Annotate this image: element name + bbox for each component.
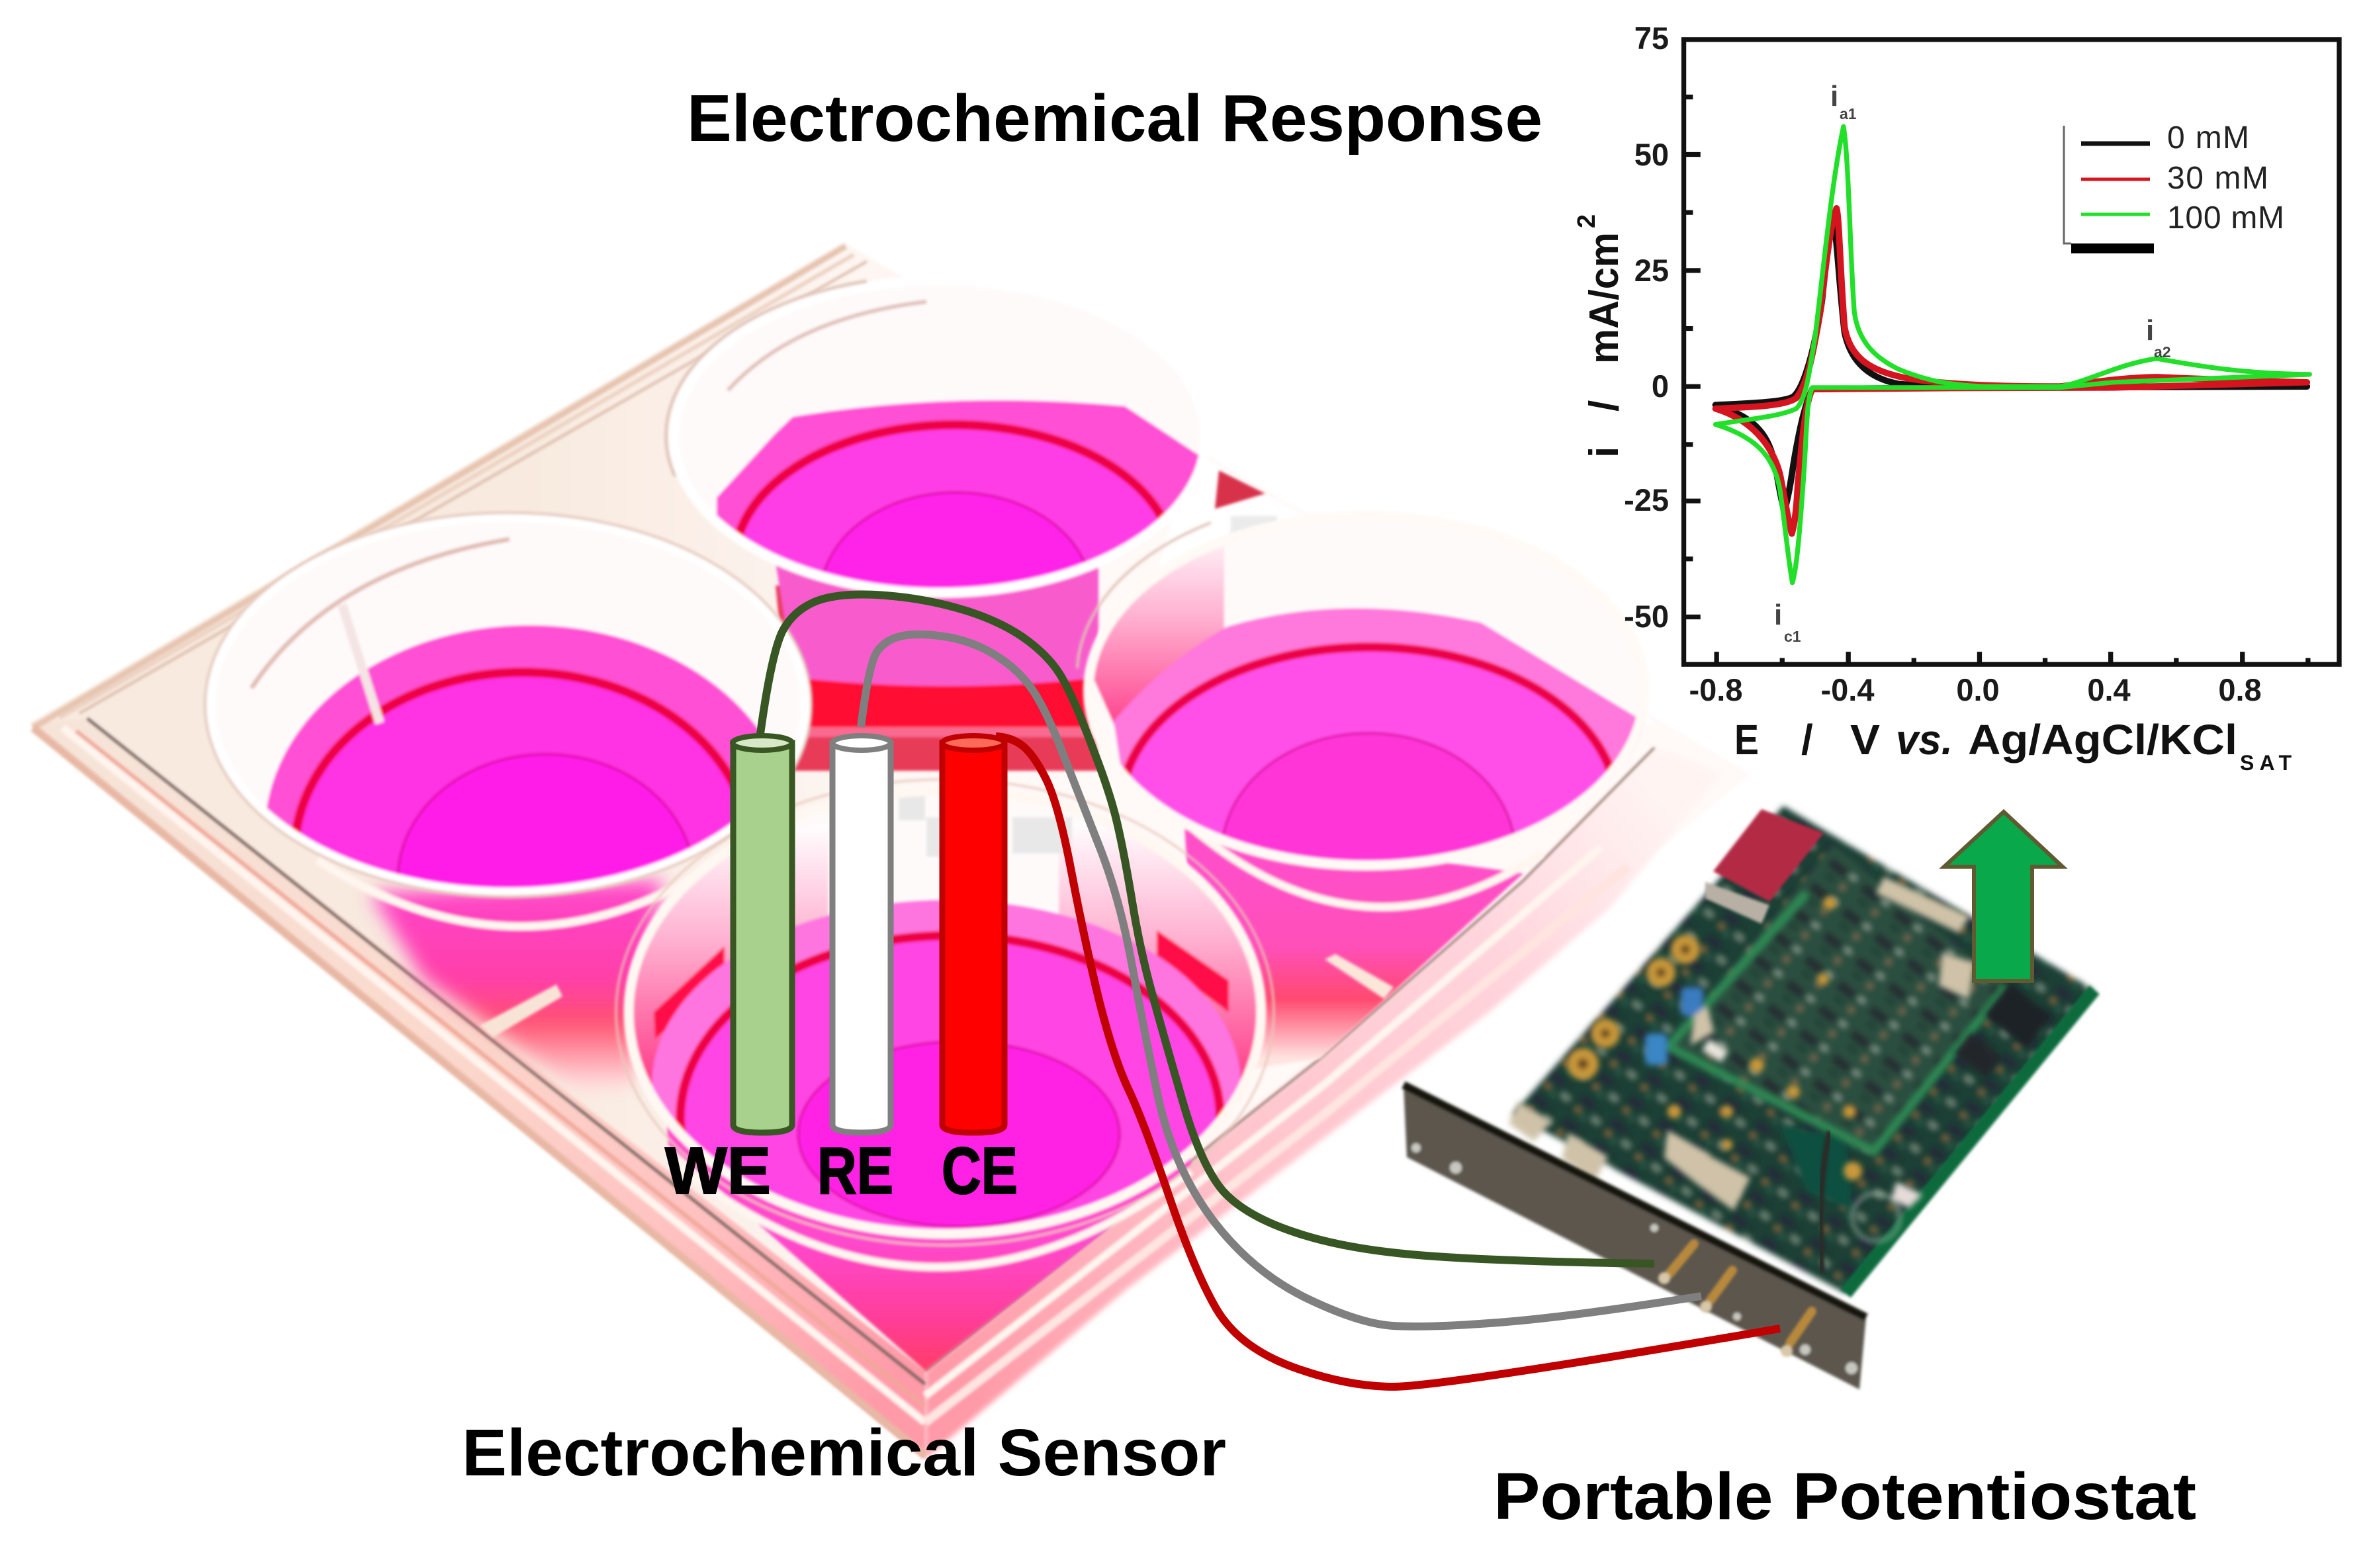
peak label ia2 [2146,314,2171,361]
plate body [30,242,1750,1459]
daughter board [1668,844,2006,1152]
x axis tick labels: 0.0 [1956,672,2000,707]
gold, blue and beige components [1509,877,2051,1241]
well tab: left [480,984,562,1037]
well: right [1077,512,1654,1072]
board green edge [1846,990,2094,1293]
reference electrode RE [832,736,891,1133]
electrode labels [665,1134,1018,1208]
well: top [666,277,1211,771]
SMA connectors [1658,1244,1812,1357]
teal board patch [1780,1125,1853,1211]
x axis tick labels: -0.8 [1689,672,1743,707]
peak label ia1: i [1830,80,1838,112]
well tab: right [1325,954,1394,999]
curve: 100 mM [1715,126,2309,583]
y axis title: i [1582,447,1627,458]
x axis tick labels: 0.8 [2218,672,2262,707]
main circuit board [1513,806,2094,1293]
counter electrode CE [942,736,1004,1133]
checker background patch [1012,357,1423,615]
working electrode WE [733,736,792,1133]
top well wall and red base [776,586,1098,771]
well: left [205,513,811,1092]
x axis title: Ag/AgCl/KCl [1968,716,2237,763]
peak label ia1: a1 [1840,105,1857,122]
x axis title: / [1801,716,1813,763]
peak label ic1 [1774,599,1801,645]
peak label ia2: a2 [2154,343,2171,361]
title: portable potentiostat: Portable Potentiostat [1494,1459,2196,1534]
x axis title: vs. [1896,716,1953,763]
panel: portable potentiostat board [1404,806,2094,1389]
legend [2064,120,2284,253]
chart: cyclic voltammogram [1573,21,2339,775]
peak label ia2: i [2146,314,2154,347]
x axis title: SAT [2240,751,2292,775]
x axis tick labels: -0.4 [1821,672,1874,707]
y axis title: 2 [1573,214,1601,228]
y axis tick labels: 50 [1634,137,1669,172]
open white area between wells [1125,450,1654,847]
curve: 0 mM [1715,222,2307,511]
electrode labels: WE [665,1134,771,1208]
chart frame and ticks [1684,40,2339,664]
curve: 30 mM [1715,208,2307,534]
bottom well outer wall [662,1059,1191,1371]
plate edge lines [33,246,1654,1456]
voltammogram curves [1715,126,2309,583]
legend: 0 mM [2167,120,2249,155]
arrow: potentiostat to response [1944,812,2063,981]
well: bottom [616,779,1274,1371]
y axis title: / [1582,400,1627,412]
lower right plate band [925,748,1720,1459]
x axis title [1734,716,2292,775]
legend: 30 mM [2167,161,2268,196]
electrode labels: RE [817,1134,893,1208]
red triangle corner [1215,470,1265,509]
legend: 100 mM [2167,200,2284,236]
electrode labels: CE [942,1134,1018,1208]
x axis title: E [1734,716,1759,763]
y axis tick labels: -50 [1624,599,1669,634]
title: electrochemical response: Electrochemical Response [687,81,1542,155]
title: electrochemical sensor: Electrochemical Sensor [462,1416,1226,1490]
y axis title: mA/cm [1582,232,1627,364]
left well outer wall [371,880,662,1092]
y axis tick labels: 75 [1634,21,1669,56]
wire: reference electrode to potentiostat [861,634,1701,1327]
red power module [1705,809,1824,924]
x axis tick labels [1689,672,2262,707]
y axis tick labels: -25 [1624,482,1669,517]
lower left plate band [30,719,925,1459]
right well outer wall [1184,827,1523,1072]
x axis tick labels: 0.4 [2087,672,2131,707]
peak label ic1: i [1774,599,1782,631]
metal faceplate [1404,1085,1866,1389]
peak label ic1: c1 [1784,628,1801,645]
y axis tick labels [1624,21,1669,634]
dark wire on board [1820,1131,1830,1273]
panel: electrochemical sensor well plate [30,242,1750,1459]
y axis tick labels: 0 [1652,369,1669,404]
x axis title: V [1850,716,1880,763]
wire: counter electrode to potentiostat [996,736,1780,1387]
peak label ia1 [1830,80,1857,122]
wire: working electrode to potentiostat [760,595,1654,1264]
y axis title [1573,214,1627,458]
y axis tick labels: 25 [1634,253,1669,288]
